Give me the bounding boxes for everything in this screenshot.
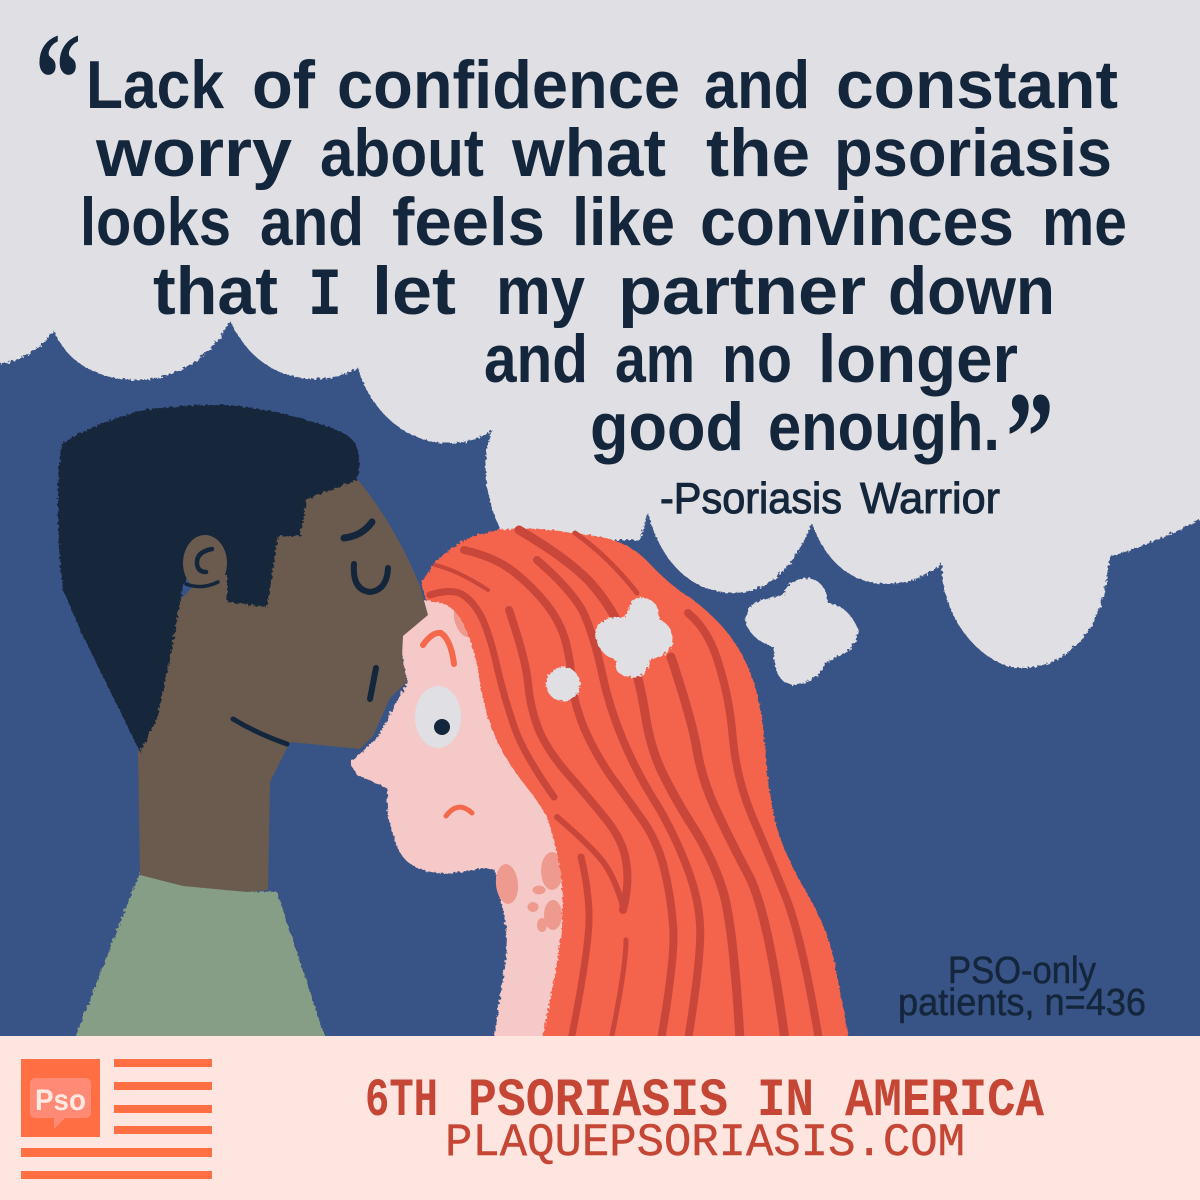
quote line 2: worry [95, 115, 292, 191]
hair strands [430, 530, 819, 1040]
man hair [58, 405, 359, 752]
attribution [660, 474, 1000, 523]
quote line 4: I [308, 258, 342, 335]
quote line 4: down [888, 253, 1055, 329]
quote line 1: constant [836, 47, 1118, 123]
quote line 4: partner [618, 253, 866, 329]
footer title [365, 1071, 1045, 1132]
quote line 2: the [706, 115, 810, 191]
man jaw line [233, 719, 287, 744]
speech bubble [30, 1078, 91, 1129]
attribution: Warrior [860, 474, 1000, 523]
quote line 6: good [590, 389, 744, 465]
woman hair [421, 528, 850, 1046]
quote text [35, 7, 1127, 523]
woman eye [415, 686, 461, 748]
woman figure [350, 528, 850, 1046]
footer band [0, 1036, 1200, 1200]
quote line 5: longer [818, 321, 1018, 397]
quote line 4: my [496, 253, 585, 329]
quote line 3: convinces [700, 184, 1014, 260]
sample size note: PSO-only [948, 950, 1096, 992]
footer title: 6TH [365, 1071, 438, 1132]
quote line 2: about [320, 115, 484, 191]
quote line 3: looks [80, 184, 231, 260]
man nose line [370, 668, 376, 699]
flag logo [21, 1059, 212, 1179]
quote line 6: enough. [768, 389, 1000, 465]
quote line 4 [153, 253, 1055, 335]
man closed eye [354, 564, 388, 592]
footer title: AMERICA [845, 1071, 1045, 1132]
closing quotation mark: ” [1006, 366, 1054, 510]
psoriasis flakes in hair [546, 597, 673, 701]
quote line 1: Lack [86, 47, 224, 123]
quote line 5 [484, 321, 1018, 397]
quote line 5: and [484, 321, 588, 397]
quote line 3: and [260, 184, 364, 260]
quote line 2: what [511, 115, 666, 191]
flag canton [21, 1059, 100, 1137]
quote line 3: feels [392, 184, 545, 260]
sample size note [898, 950, 1146, 1024]
woman face and neck [350, 600, 600, 1046]
quote line 2: psoriasis [834, 115, 1112, 191]
quote line 1: of [252, 47, 315, 123]
opening quotation mark: “ [35, 7, 81, 151]
quote line 2 [95, 115, 1112, 191]
small thought bubble [745, 578, 858, 685]
man ear [183, 535, 227, 591]
man face and neck [138, 480, 428, 892]
logo text: Pso [35, 1084, 86, 1117]
quote line 5: no [722, 321, 792, 397]
footer website: PLAQUEPSORIASIS.COM [445, 1117, 965, 1169]
flag stripes [21, 1059, 212, 1179]
quote line 1 [86, 47, 1118, 123]
quote line 3: me [1042, 184, 1127, 260]
man shirt [72, 873, 328, 1046]
quote line 1: and [704, 47, 810, 123]
quote line 3: like [572, 184, 675, 260]
thought cloud [0, 0, 1200, 668]
quote line 4: that [153, 253, 278, 329]
man figure [58, 405, 428, 1046]
woman mouth [446, 807, 472, 816]
man eyebrow [344, 522, 372, 538]
quote line 4: let [372, 253, 456, 329]
attribution: -Psoriasis [660, 474, 842, 523]
woman eyebrow [423, 633, 454, 664]
sample size note: patients, n=436 [898, 982, 1146, 1024]
quote line 6 [590, 389, 1000, 465]
footer title: IN [757, 1071, 814, 1132]
quote line 1: confidence [337, 47, 680, 123]
quote line 5: am [615, 321, 695, 397]
footer title: PSORIASIS [468, 1071, 728, 1132]
psoriasis patches [450, 602, 563, 932]
quote line 3 [80, 184, 1127, 260]
